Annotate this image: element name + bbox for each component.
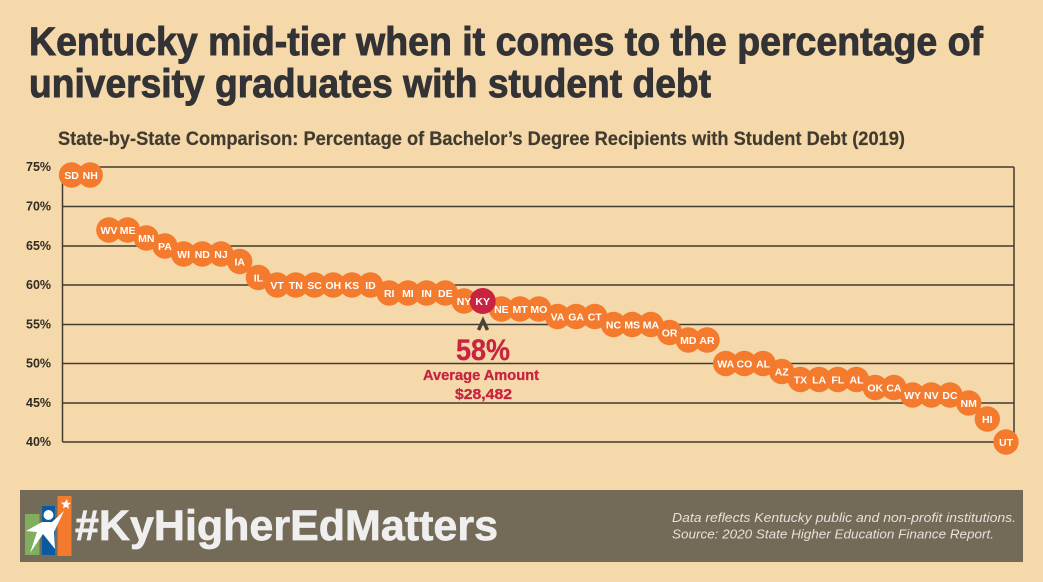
state labels: NM: [961, 398, 977, 410]
y-axis labels: 70%: [26, 200, 51, 214]
y-axis labels: 55%: [26, 318, 51, 332]
state labels: WA: [717, 358, 735, 370]
state labels: VT: [270, 280, 284, 292]
state labels: KY: [475, 296, 490, 308]
hashtag: #KyHigherEdMatters: [75, 502, 498, 550]
state labels: TX: [794, 374, 807, 386]
state labels: ND: [195, 249, 210, 261]
callout: Kentucky value: [423, 334, 539, 403]
state labels: KS: [345, 280, 359, 292]
state labels: AL: [756, 358, 771, 370]
y-axis labels: 60%: [26, 278, 51, 292]
state markers: [59, 162, 1019, 455]
footer banner: [20, 490, 1023, 562]
callout: Kentucky value: Average Amount: [423, 367, 539, 384]
state labels: RI: [384, 288, 395, 300]
callout: Kentucky value: 58%: [456, 334, 510, 367]
title: university graduates with student debt: [29, 62, 711, 106]
state labels: IL: [254, 272, 264, 284]
state labels: FL: [831, 374, 845, 386]
state labels: MN: [138, 233, 154, 245]
state labels: LA: [812, 374, 827, 386]
y-axis labels: 75%: [26, 160, 51, 174]
state labels: AL: [850, 374, 864, 386]
callout: Kentucky value: $28,482: [455, 386, 512, 403]
state labels: AR: [699, 335, 715, 347]
state labels: MO: [530, 304, 547, 316]
icon: Ky higher ed logo: [25, 496, 72, 556]
y-axis labels: 40%: [26, 435, 51, 449]
state labels: HI: [982, 414, 993, 426]
state labels: OH: [325, 280, 341, 292]
state labels: NV: [924, 390, 939, 402]
state labels: UT: [999, 437, 1014, 449]
state labels: NY: [457, 296, 471, 308]
title: [29, 20, 984, 106]
state labels: MS: [624, 320, 640, 332]
state labels: NJ: [214, 249, 228, 261]
axes and grid lines: [62, 167, 1014, 442]
state labels: SC: [307, 280, 322, 292]
state labels: NH: [83, 170, 98, 182]
state labels: GA: [568, 312, 584, 324]
state labels: DE: [438, 288, 453, 300]
source note: Data reflects Kentucky public and non-profit institutions.: [672, 510, 1016, 525]
state labels: MD: [680, 335, 697, 347]
state labels: PA: [158, 241, 172, 253]
chart subtitle: State-by-State Comparison: Percentage of Bachelor’s Degree Recipients with Student Debt (2019): [58, 129, 905, 150]
state labels: CT: [588, 312, 602, 324]
state labels: IN: [421, 288, 432, 300]
source note: Source: 2020 State Higher Education Finance Report.: [672, 526, 994, 542]
state labels: OK: [867, 382, 883, 394]
state labels: AZ: [775, 366, 789, 378]
state labels: OR: [662, 328, 678, 340]
state labels: MI: [402, 288, 414, 300]
state labels: IA: [234, 256, 245, 268]
state labels: WY: [904, 390, 921, 402]
state labels: WI: [177, 249, 190, 261]
title: Kentucky mid-tier when it comes to the percentage of: [29, 20, 984, 64]
state labels: SD: [64, 170, 79, 182]
state labels: ID: [365, 280, 376, 292]
y-axis labels: 45%: [26, 396, 51, 410]
state labels: DC: [942, 390, 958, 402]
state labels: TN: [289, 280, 303, 292]
state labels: ME: [120, 225, 135, 237]
y-axis labels: 50%: [26, 356, 51, 370]
dot plot chart: [26, 160, 1019, 455]
source note: [672, 510, 1016, 542]
state labels: NC: [606, 320, 621, 332]
state labels: CO: [737, 358, 752, 370]
state labels: [64, 170, 1014, 449]
state labels: MA: [643, 320, 659, 332]
state labels: MT: [513, 304, 528, 316]
y-axis labels: 65%: [26, 239, 51, 253]
state labels: NE: [494, 304, 509, 316]
state labels: WV: [100, 225, 117, 237]
y-axis labels: [26, 160, 51, 449]
arrow: pointer to Kentucky: [478, 320, 488, 330]
state labels: CA: [886, 382, 902, 394]
Kentucky highlighted marker: [470, 288, 496, 314]
state labels: VA: [551, 312, 565, 324]
